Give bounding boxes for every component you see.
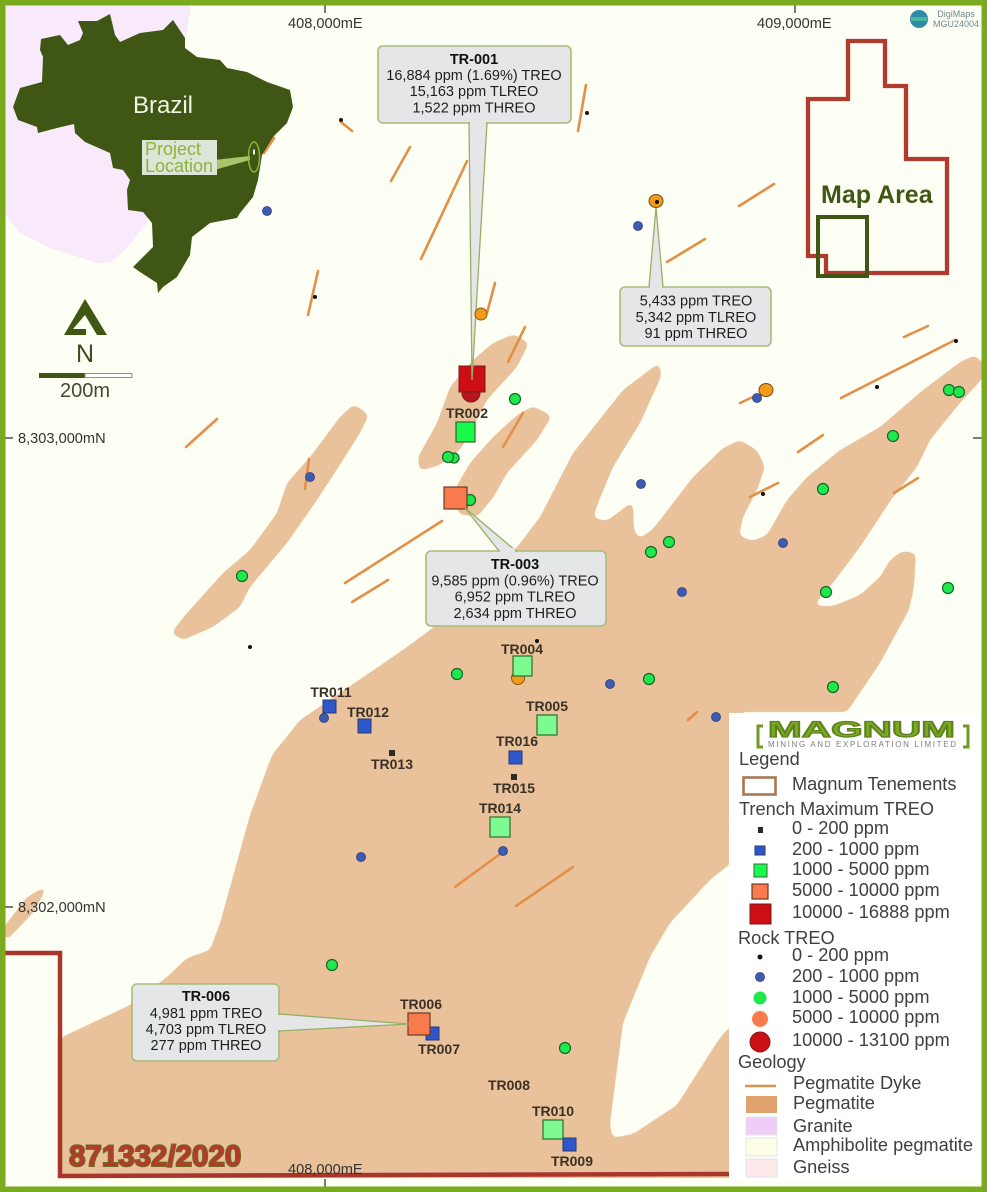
- pegmatite geology areas: [3, 334, 987, 1178]
- callout: TR-003: [426, 508, 606, 626]
- callout: TR-006: 4,703 ppm TLREO: [146, 1022, 266, 1038]
- legend: geology: [738, 1052, 973, 1177]
- callout: TR-001: [378, 46, 571, 380]
- granite geology area: [5, 5, 191, 263]
- legend: geology: Granite: [793, 1116, 853, 1136]
- digimaps credit: DigiMaps: [937, 9, 975, 19]
- legend: rock TREO: 5000 - 10000 ppm: [792, 1007, 940, 1027]
- legend: geology: Amphibolite pegmatite: [793, 1135, 973, 1155]
- tenement 871332/2020 boundary: [5, 953, 729, 1176]
- logo: Magnum Mining and Exploration: [758, 717, 968, 749]
- north arrow: N: [76, 340, 94, 368]
- scale bar: [39, 373, 132, 402]
- callout: rock sample: 5,342 ppm TLREO: [636, 310, 756, 326]
- callout: TR-001: 16,884 ppm (1.69%) TREO: [386, 68, 562, 84]
- trench markers and labels: TR009: [551, 1153, 593, 1169]
- digimaps credit: MGU24004: [933, 19, 979, 29]
- callout: TR-001: 1,522 ppm THREO: [412, 100, 536, 116]
- legend: geology: Pegmatite Dyke: [793, 1073, 921, 1093]
- trench markers and labels: TR013: [371, 756, 413, 772]
- trench markers and labels: TR006: [400, 996, 442, 1012]
- trench markers and labels: TR002: [446, 405, 488, 421]
- logo: Magnum Mining and Exploration: MAGNUM: [768, 717, 955, 742]
- legend: rock TREO: 1000 - 5000 ppm: [792, 987, 930, 1007]
- trench markers and labels: TR014: [479, 800, 521, 816]
- legend: trench maximum TREO: [739, 799, 950, 924]
- inset map of Brazil: [13, 14, 293, 293]
- coordinate grid labels and ticks: 408,000mE: [288, 16, 363, 32]
- coordinate grid labels and ticks: 409,000mE: [757, 16, 832, 32]
- legend: trench maximum TREO: 0 - 200 ppm: [792, 818, 889, 838]
- trench markers and labels: TR010: [532, 1103, 574, 1119]
- trench markers and labels: TR012: [347, 704, 389, 720]
- inset map of Brazil: Project: [145, 139, 201, 159]
- locator: tenement outline: [808, 41, 947, 273]
- legend: geology: Geology: [738, 1052, 807, 1072]
- callout: TR-003: 6,952 ppm TLREO: [455, 590, 575, 606]
- callout: TR-003: 9,585 ppm (0.96%) TREO: [431, 574, 599, 590]
- callout: TR-003: TR-003: [491, 557, 539, 573]
- panel: legend: [729, 713, 982, 1181]
- pegmatite dykes: [186, 85, 955, 906]
- trench markers and labels: TR011: [310, 684, 352, 700]
- coordinate grid labels and ticks: 408,000mE: [288, 1162, 363, 1178]
- legend: geology: Gneiss: [793, 1157, 850, 1177]
- tenement id label: 871332/2020: [69, 1140, 241, 1173]
- trench markers and labels: TR004: [501, 641, 543, 657]
- callout: TR-006: 277 ppm THREO: [151, 1038, 261, 1054]
- rock sample points: [236, 111, 964, 1054]
- callout: rock sample: [620, 207, 771, 346]
- north arrow: [64, 299, 107, 368]
- legend: tenements: Magnum Tenements: [792, 774, 956, 794]
- callout: TR-006: 4,981 ppm TREO: [150, 1006, 262, 1022]
- callout: TR-001: TR-001: [450, 52, 498, 68]
- rock point: orange with black dot: [649, 194, 663, 208]
- logo: Magnum Mining and Exploration: MINING AND EXPLORATION LIMITED: [768, 740, 956, 749]
- trench markers and labels: TR007: [418, 1041, 460, 1057]
- callout: TR-006: TR-006: [182, 989, 230, 1005]
- legend: rock TREO: 200 - 1000 ppm: [792, 966, 919, 986]
- legend: rock TREO: 10000 - 13100 ppm: [792, 1030, 950, 1050]
- legend: rock TREO: Rock TREO: [738, 928, 835, 948]
- trench markers and labels: TR016: [496, 733, 538, 749]
- trench markers and labels: TR005: [526, 698, 568, 714]
- legend: geology: Pegmatite: [793, 1093, 875, 1113]
- panel: legend: Legend: [739, 749, 800, 769]
- scale bar: 200m: [60, 380, 110, 402]
- callout: TR-003: 2,634 ppm THREO: [453, 606, 577, 622]
- locator: map area: [818, 181, 934, 276]
- callout: TR-006: [132, 984, 409, 1061]
- legend: trench maximum TREO: 5000 - 10000 ppm: [792, 880, 940, 900]
- legend: trench maximum TREO: 200 - 1000 ppm: [792, 839, 919, 859]
- trench markers and labels: TR015: [493, 780, 535, 796]
- legend: rock TREO: [738, 928, 950, 1052]
- coordinate grid labels and ticks: 8,302,000mN: [18, 900, 106, 916]
- legend: trench maximum TREO: 1000 - 5000 ppm: [792, 859, 930, 879]
- inset map of Brazil: Location: [145, 156, 213, 176]
- callout: rock sample: 5,433 ppm TREO: [640, 294, 752, 310]
- locator: map area: Map Area: [821, 181, 934, 209]
- legend: rock TREO: 0 - 200 ppm: [792, 945, 889, 965]
- callout: TR-001: 15,163 ppm TLREO: [410, 84, 538, 100]
- callout: rock sample: 91 ppm THREO: [645, 326, 747, 342]
- inset map of Brazil: Brazil: [133, 92, 193, 119]
- legend: trench maximum TREO: 10000 - 16888 ppm: [792, 902, 950, 922]
- legend: trench maximum TREO: Trench Maximum TREO: [739, 799, 934, 819]
- digimaps credit: [910, 9, 979, 29]
- trench markers and labels: TR008: [488, 1077, 530, 1093]
- rock point: orange beside TR-001 pointer: [475, 308, 487, 320]
- trench markers and labels: [310, 366, 593, 1169]
- coordinate grid labels and ticks: 8,303,000mN: [18, 431, 106, 447]
